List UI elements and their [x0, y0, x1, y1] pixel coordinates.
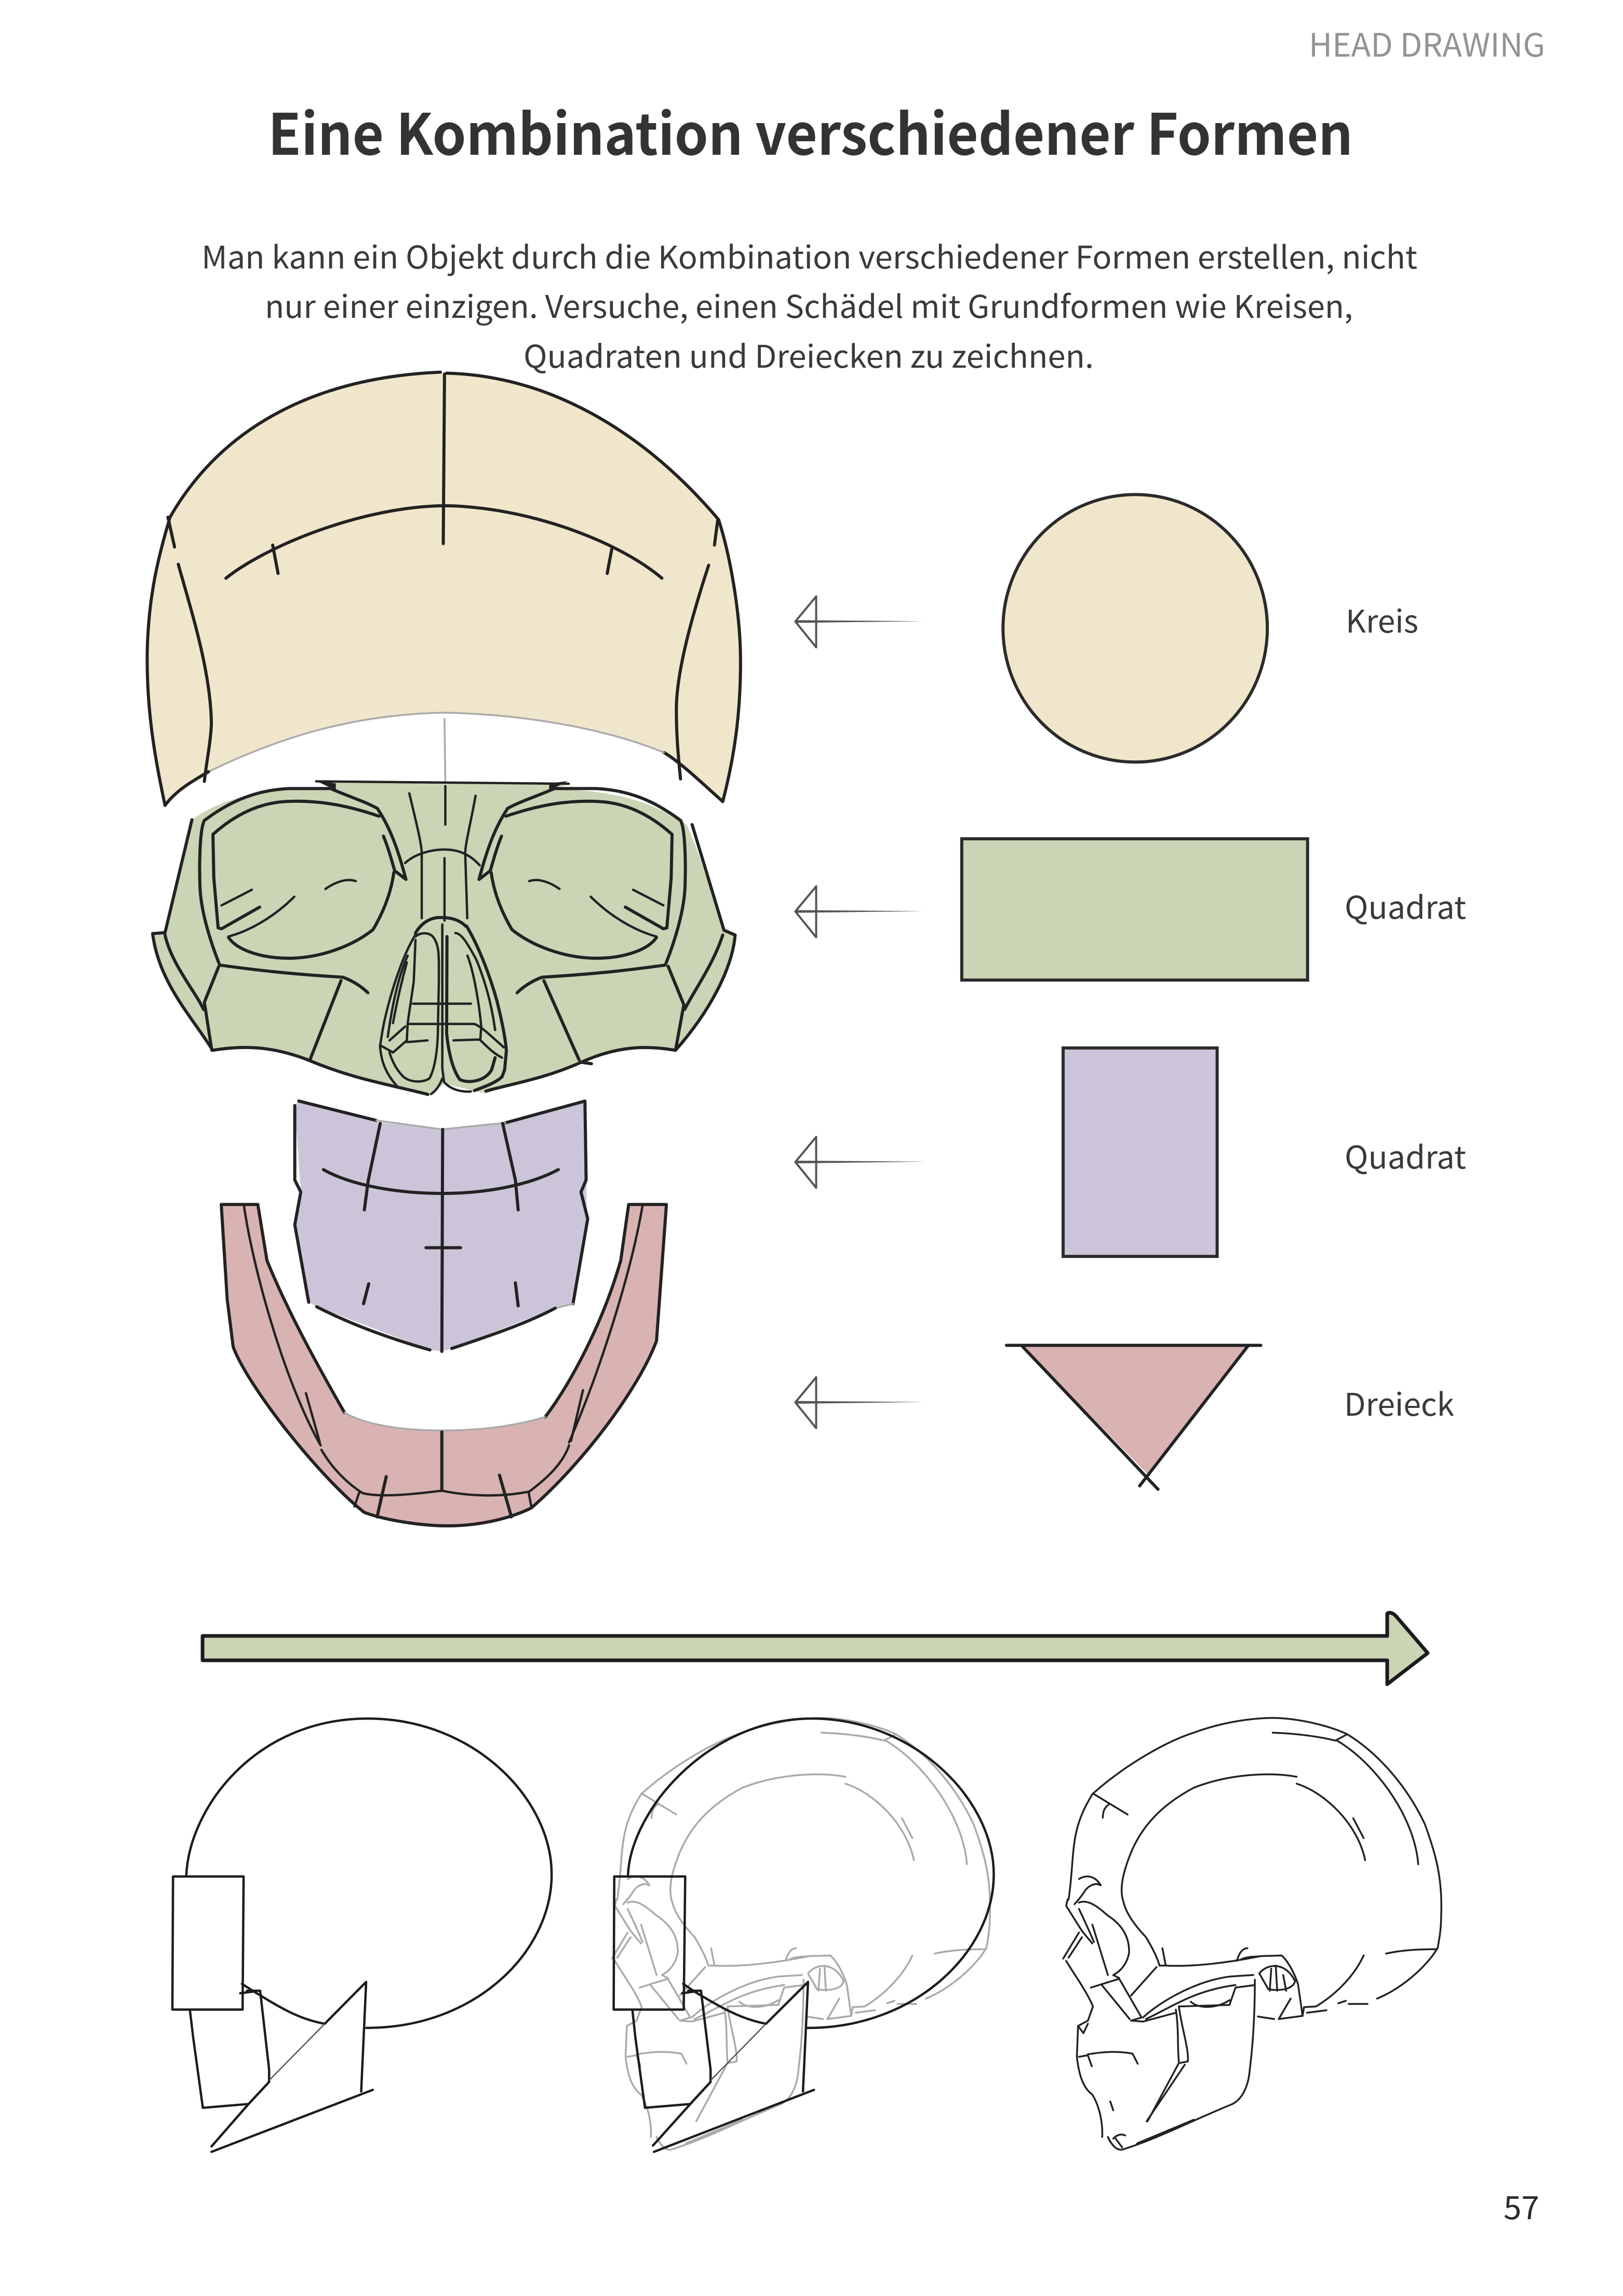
arrow 2	[795, 887, 924, 937]
nose cavity	[380, 918, 506, 1094]
skull step 2: shapes over faint skull	[612, 1718, 994, 2152]
label: Kreis: Kreis	[1346, 597, 1418, 642]
arrow 1	[795, 596, 924, 647]
right eye socket	[479, 781, 686, 993]
intro text: Man kann ein Objekt durch die Kombination verschiedener Formen erstellen, nicht	[202, 233, 1417, 278]
section label: HEAD DRAWING: HEAD DRAWING	[1309, 19, 1545, 66]
rectangle: Quadrat green	[962, 839, 1308, 980]
intro text: Quadraten und Dreiecken zu zeichnen.	[524, 332, 1094, 377]
upper jaw (lavender)	[295, 1101, 588, 1351]
triangle: Dreieck	[1007, 1345, 1261, 1489]
midface base shape	[153, 781, 735, 1094]
lower jaw (pink)	[221, 1204, 666, 1526]
arrow 4	[795, 1377, 924, 1428]
cranium (cream)	[147, 372, 741, 805]
circle: Kreis	[1003, 494, 1267, 762]
intro text: nur einer einzigen. Versuche, einen Schädel mit Grundformen wie Kreisen,	[265, 282, 1353, 327]
label: Dreieck: Dreieck	[1344, 1380, 1454, 1425]
label: Quadrat lavender: Quadrat	[1345, 1133, 1466, 1178]
midface with eye sockets and nose (green)	[153, 781, 735, 1094]
bold shape overlay	[614, 1718, 994, 2152]
progress arrow	[203, 1613, 1428, 1684]
left eye socket	[199, 781, 406, 993]
rectangle: Quadrat lavender	[1063, 1048, 1217, 1256]
title: Eine Kombination verschiedener Formen	[268, 90, 1353, 171]
arrow 3	[795, 1137, 924, 1188]
shape column	[795, 494, 1308, 1489]
skull step 1: basic shapes	[172, 1718, 552, 2152]
intro text	[202, 233, 1417, 377]
skull step 3: finished line drawing	[1063, 1718, 1441, 2150]
exploded skull: maxilla and jaw	[221, 1101, 666, 1526]
page number: 57	[1504, 2182, 1539, 2228]
faint skull underlay	[612, 1718, 990, 2150]
label: Quadrat green: Quadrat	[1345, 883, 1466, 928]
